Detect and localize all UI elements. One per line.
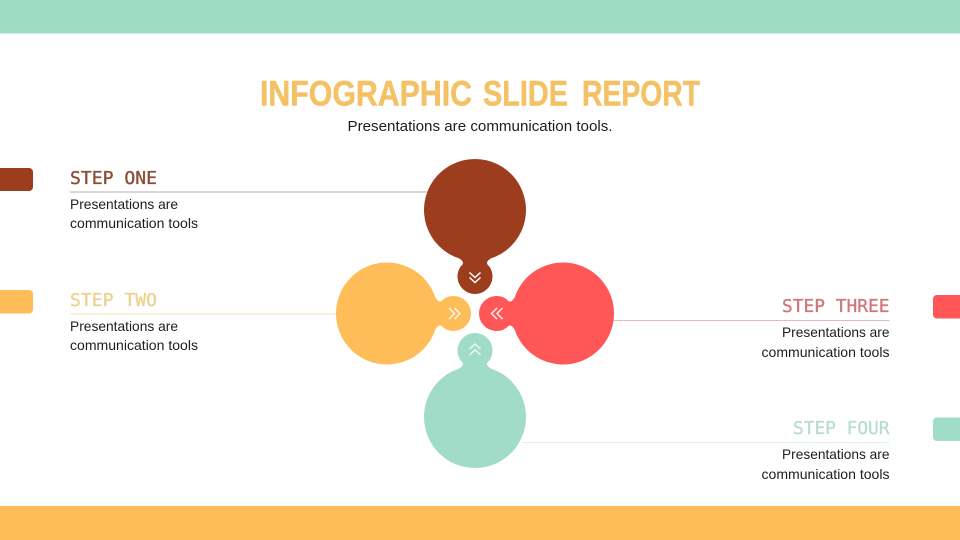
text: step three: communication tools [762,344,890,360]
heading: step three: STEP THREE [782,296,890,317]
panel: step one [0,168,430,231]
petal: yellow [336,262,471,364]
heading: step one: STEP ONE [70,168,157,189]
diagram: four petals [336,159,614,468]
tab: step three [933,295,960,318]
tab: step four [933,418,960,441]
title: SLIDE [483,74,568,114]
text: step one: Presentations are [70,196,178,212]
tab: step one [0,168,33,191]
heading: step two: STEP TWO [70,290,157,311]
subtitle: Presentations are communication tools. [348,118,612,135]
petal: brown [424,159,526,294]
title: REPORT [582,74,700,114]
panel: step two [0,290,338,353]
icon: double chevron left [492,308,502,319]
connector: step three [612,320,890,321]
text: step two: Presentations are [70,318,178,334]
text: step one: communication tools [70,215,198,231]
icon: double chevron right [449,308,460,319]
text: step four: Presentations are [782,446,890,462]
connector: step one [70,191,430,193]
bottom band [0,506,960,540]
panel: step three [612,295,960,360]
petal: red [479,262,614,364]
title: INFOGRAPHIC [260,74,472,114]
panel: step four [522,418,960,482]
text: step four: communication tools [762,466,890,482]
connector: step four [522,442,890,443]
icon: double chevron down [470,272,480,282]
top band [0,0,960,34]
petal: teal [424,333,526,468]
icon: double chevron up [470,344,480,355]
text: step two: communication tools [70,337,198,353]
heading: step four: STEP FOUR [793,418,890,439]
tab: step two [0,290,33,314]
connector: step two [70,313,338,314]
text: step three: Presentations are [782,324,890,340]
